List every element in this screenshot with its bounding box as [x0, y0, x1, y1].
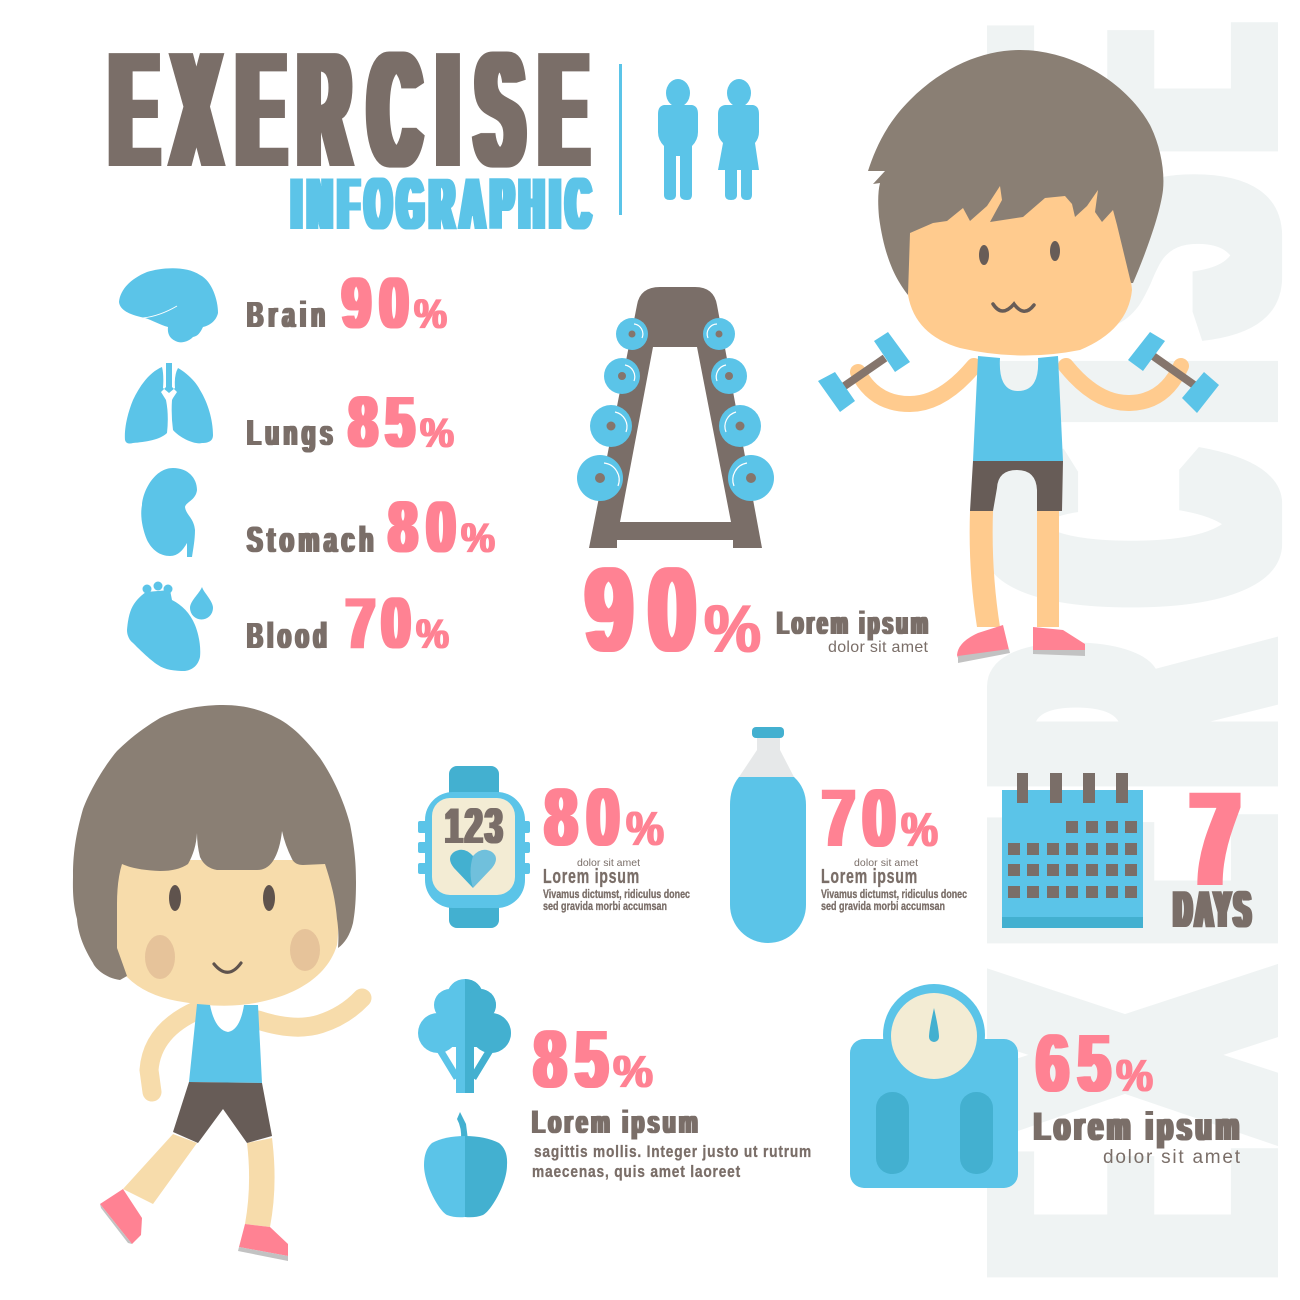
icon: kidney [141, 468, 197, 557]
girl shorts [173, 1082, 272, 1143]
girl hair [73, 705, 356, 980]
organ stat: Blood 70%: Blood [247, 615, 331, 656]
girl legs [123, 1134, 275, 1227]
girl face [116, 860, 338, 1006]
organ stat: Stomach 80%: 80 [389, 487, 455, 568]
organ stat: Lungs 85%: % [420, 409, 454, 456]
icon: heart with blood drop [127, 582, 213, 671]
stat: 85% with description: sagittis mollis. Integer justo ut rutrum [534, 1142, 812, 1161]
stat: 80% with description: dolor sit amet [577, 857, 640, 869]
icon: smart watch: 123 [445, 798, 505, 854]
boy mouth [993, 304, 1034, 311]
organ stat: Blood 70%: 70 [346, 583, 410, 664]
organ stat: Lungs 85%: Lungs [247, 412, 337, 453]
stat: 85% with description [532, 1014, 812, 1181]
organ stat: Stomach 80%: % [461, 514, 495, 561]
boy face [908, 175, 1132, 356]
girl shoes [100, 1189, 288, 1261]
boy legs [970, 511, 1059, 627]
stat: 7 days: 7 [1193, 765, 1237, 914]
organ stat: Lungs 85% [247, 382, 454, 463]
stat: 85% with description: Lorem ipsum [532, 1104, 701, 1140]
stat: 65% with description: % [1116, 1050, 1153, 1101]
organ stat: Blood 70%: % [416, 610, 449, 657]
boy right dumbbell [1128, 332, 1219, 413]
divider line [619, 64, 622, 215]
stat: 65% with description: dolor sit amet [1103, 1147, 1241, 1168]
stat: 70% with description [821, 773, 967, 913]
stat: 85% with description: 85 [534, 1014, 608, 1105]
stat: 70% with description: % [901, 804, 938, 857]
boy shorts [970, 461, 1063, 511]
stat: 85% with description: maecenas, quis amet laoreet [532, 1162, 741, 1181]
icon: lungs [125, 363, 213, 444]
organ stat: Brain 90% [247, 263, 447, 344]
stat: 80% with description: 80 [545, 772, 619, 863]
icon: calendar [1002, 773, 1143, 928]
icon: brain [119, 268, 218, 342]
stat: 65% with description: 65 [1036, 1018, 1110, 1109]
girl eyes [169, 885, 275, 911]
background word: EXERCISE [895, 36, 1300, 1268]
stat: 80% with description: sed gravida morbi accumsan [543, 899, 667, 913]
organ stat: Brain 90%: % [414, 290, 447, 337]
organ stat: Blood 70% [247, 583, 449, 664]
stat: 7 days [1174, 765, 1254, 939]
icon: smart watch [418, 766, 530, 928]
girl cheeks [145, 929, 320, 979]
boy shoes [957, 625, 1085, 663]
stat: 90% lorem ipsum: 90 [585, 544, 696, 678]
text: INFOGRAPHIC [292, 164, 597, 245]
stat: 80% with description: Lorem ipsum [543, 866, 640, 888]
character: boy with dumbbells [818, 50, 1219, 663]
boy hair [868, 50, 1163, 295]
stat: 90% lorem ipsum [585, 544, 931, 678]
stat: 90% lorem ipsum: dolor sit amet [828, 639, 929, 656]
stat: 90% lorem ipsum: Lorem ipsum [777, 605, 931, 641]
girl mouth [214, 963, 241, 972]
icon: apple [424, 1112, 507, 1217]
organ stat: Brain 90%: Brain [247, 294, 330, 335]
character: girl [73, 705, 362, 1261]
boy tank top [973, 356, 1063, 461]
organ stat: Stomach 80% [247, 487, 495, 568]
stat: 70% with description: 70 [822, 773, 895, 864]
stat: 70% with description: Lorem ipsum [821, 866, 918, 888]
icon: water bottle [730, 727, 806, 943]
stat: 70% with description: dolor sit amet [854, 857, 918, 869]
icon: man and woman figures [658, 79, 759, 200]
boy eyes [979, 241, 1060, 265]
stat: 65% with description [1034, 1018, 1243, 1168]
stat: 80% with description [543, 772, 690, 913]
icon: dumbbell rack [577, 287, 774, 548]
title: EXERCISE [111, 17, 587, 201]
boy arms [858, 366, 1181, 404]
stat: 90% lorem ipsum: % [704, 591, 761, 667]
organ stat: Stomach 80%: Stomach [247, 519, 378, 560]
stat: 70% with description: Vivamus dictumst, ridiculus donec [821, 887, 967, 901]
girl arms [149, 998, 362, 1092]
girl tank top [189, 1004, 262, 1083]
stat: 80% with description: % [626, 803, 664, 856]
icon: tree [418, 979, 511, 1093]
boy left dumbbell [818, 332, 910, 412]
icon: weighing scale [850, 984, 1018, 1188]
stat: 85% with description: % [613, 1046, 653, 1097]
stat: 70% with description: sed gravida morbi accumsan [821, 899, 945, 913]
stat: 80% with description: Vivamus dictumst, ridiculus donec [543, 887, 690, 901]
organ stat: Brain 90%: 90 [342, 263, 408, 344]
organ stat: Lungs 85%: 85 [349, 382, 414, 463]
